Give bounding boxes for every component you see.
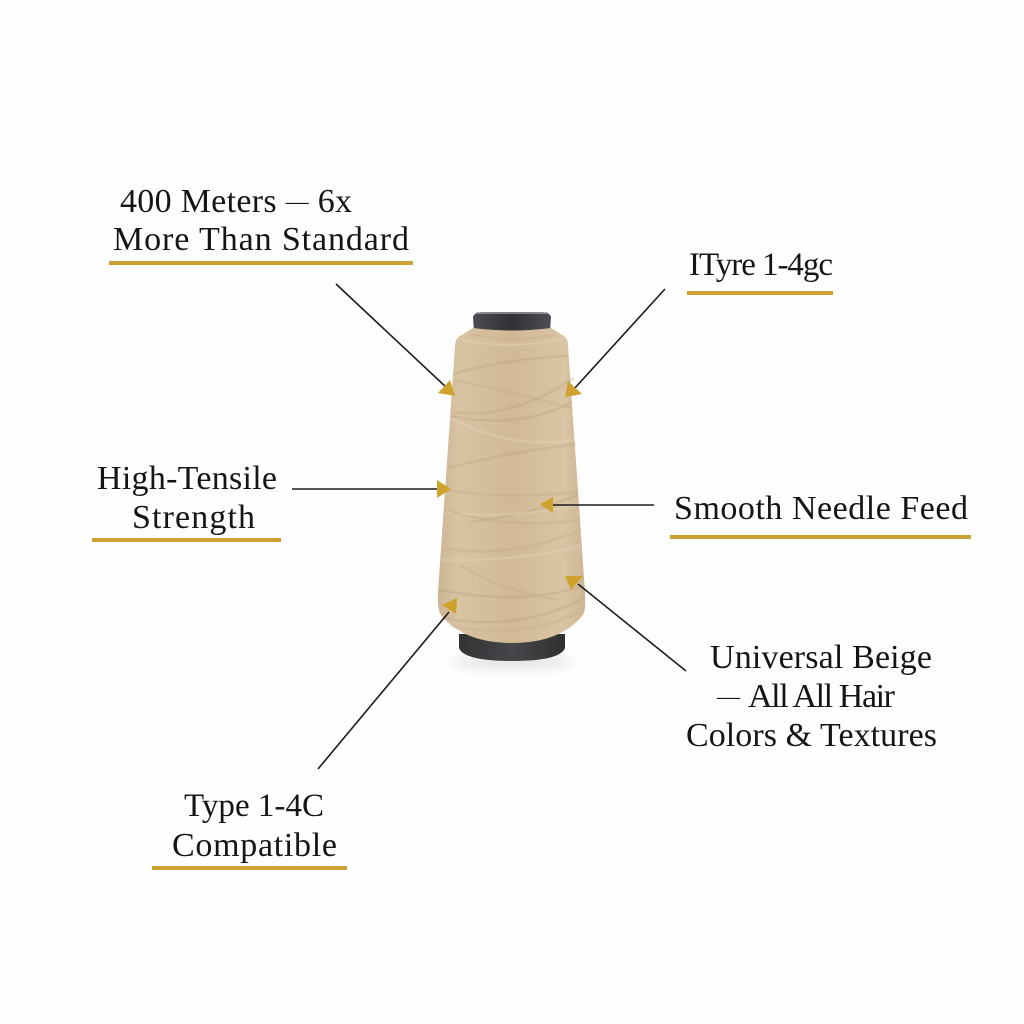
annotation: type 1-4C compatible — [152, 598, 457, 870]
annotation: high-tensile strength: Strength — [132, 499, 255, 536]
annotation: universal beige: — — [716, 684, 741, 709]
thread spool — [438, 312, 585, 668]
annotation: universal beige — [565, 576, 937, 754]
annotation: type 1-4C compatible: Compatible — [172, 827, 337, 864]
annotation: 400 meters: 400 Meters — [120, 183, 277, 220]
annotation: type 1-4C compatible: Type 1-4C — [184, 788, 324, 824]
annotation: universal beige: Colors & Textures — [686, 717, 937, 754]
annotation: garbled type label — [565, 247, 833, 397]
annotation: 400 meters — [109, 183, 455, 396]
annotation: high-tensile strength — [92, 460, 451, 542]
annotation: garbled type label: ITyre 1-4gc — [689, 247, 833, 283]
annotation: 400 meters: More Than Standard — [113, 221, 409, 258]
annotation: high-tensile strength: High-Tensile — [97, 460, 277, 497]
annotation: universal beige: Universal Beige — [710, 639, 932, 676]
annotation: smooth needle feed — [540, 490, 971, 539]
annotation: universal beige: All All Hair — [748, 678, 896, 715]
annotation: 400 meters: — — [285, 189, 310, 214]
annotation: 400 meters: 6x — [309, 183, 352, 220]
annotation: smooth needle feed: Smooth Needle Feed — [674, 490, 968, 527]
